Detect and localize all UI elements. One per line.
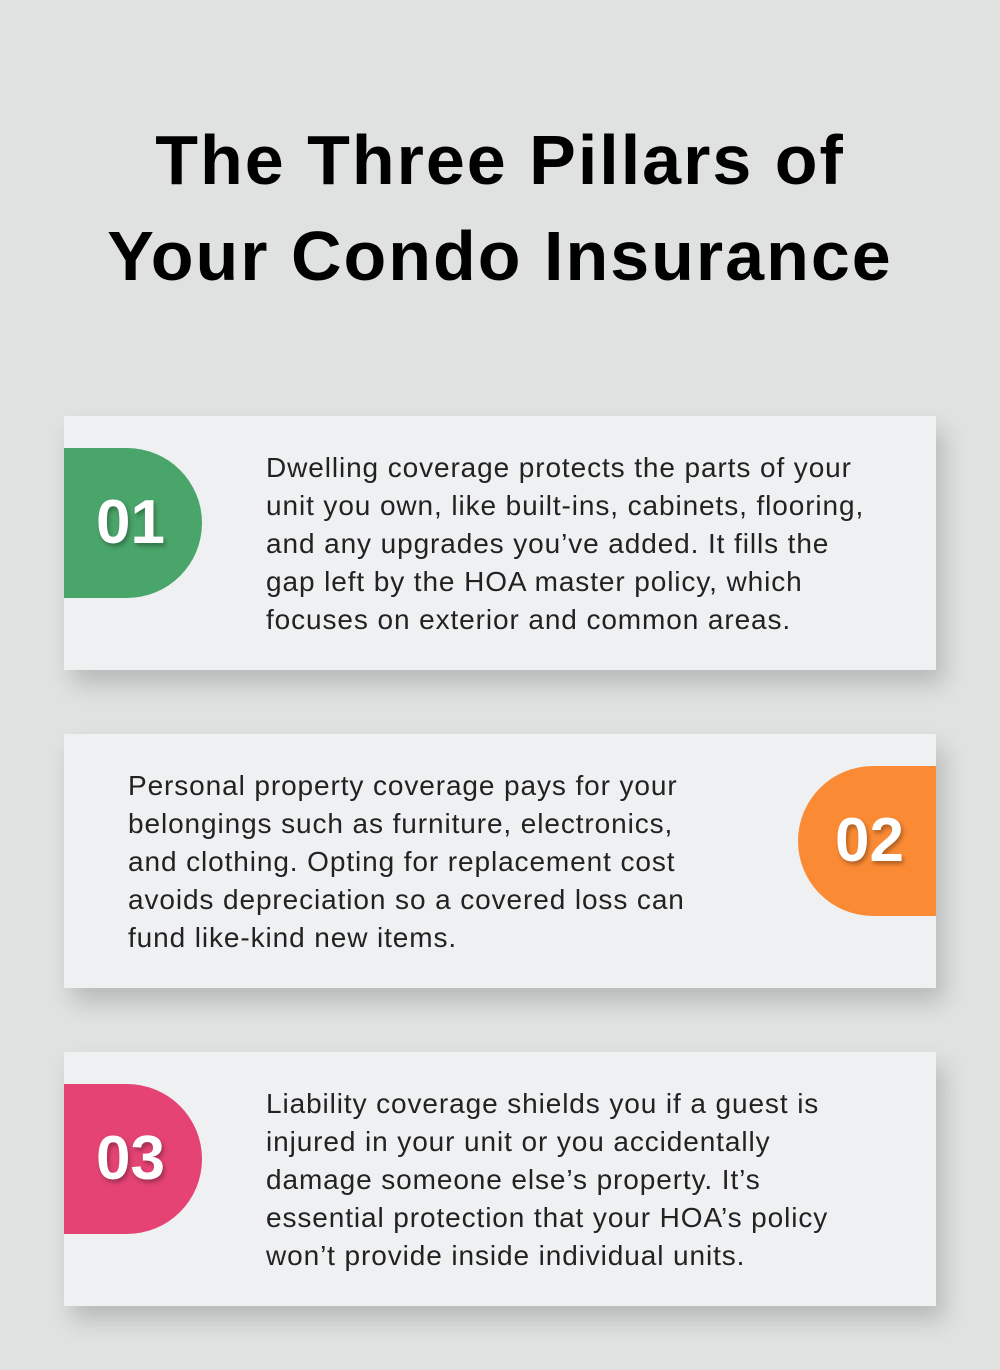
text: liability: injured in your unit or you accidentally [266,1126,770,1157]
text: liability: won’t provide inside individual units. [266,1240,745,1271]
text: liability: essential protection that your HOA’s policy [266,1202,828,1233]
badge 02: 02 [835,806,904,875]
panel: dwelling coverage [64,416,936,670]
text: liability [266,1088,828,1271]
text: personal property: fund like-kind new items. [128,922,457,953]
badge 01 [64,448,202,598]
text: liability: Liability coverage shields you if a guest is [266,1088,819,1119]
text: personal property [128,770,685,953]
text: dwelling [266,452,864,635]
panel: personal property [64,734,936,988]
title: Your Condo Insurance [107,217,893,295]
title [107,121,893,295]
text: dwelling: gap left by the HOA master policy, which [266,566,803,597]
text: personal property: and clothing. Opting for replacement cost [128,846,675,877]
text: dwelling: Dwelling coverage protects the parts of your [266,452,852,483]
badge 03: 03 [96,1124,165,1193]
panel: liability [64,1052,936,1306]
badge 03 [64,1084,202,1234]
title: The Three Pillars of [155,121,845,199]
text: dwelling: focuses on exterior and common areas. [266,604,791,635]
text: personal property: avoids depreciation so a covered loss can [128,884,685,915]
text: dwelling: and any upgrades you’ve added. It fills the [266,528,829,559]
badge 01: 01 [96,488,165,557]
text: dwelling: unit you own, like built-ins, cabinets, flooring, [266,490,864,521]
badge 02 [798,766,936,916]
text: personal property: Personal property coverage pays for your [128,770,678,801]
text: liability: damage someone else’s property. It’s [266,1164,761,1195]
text: personal property: belongings such as furniture, electronics, [128,808,673,839]
